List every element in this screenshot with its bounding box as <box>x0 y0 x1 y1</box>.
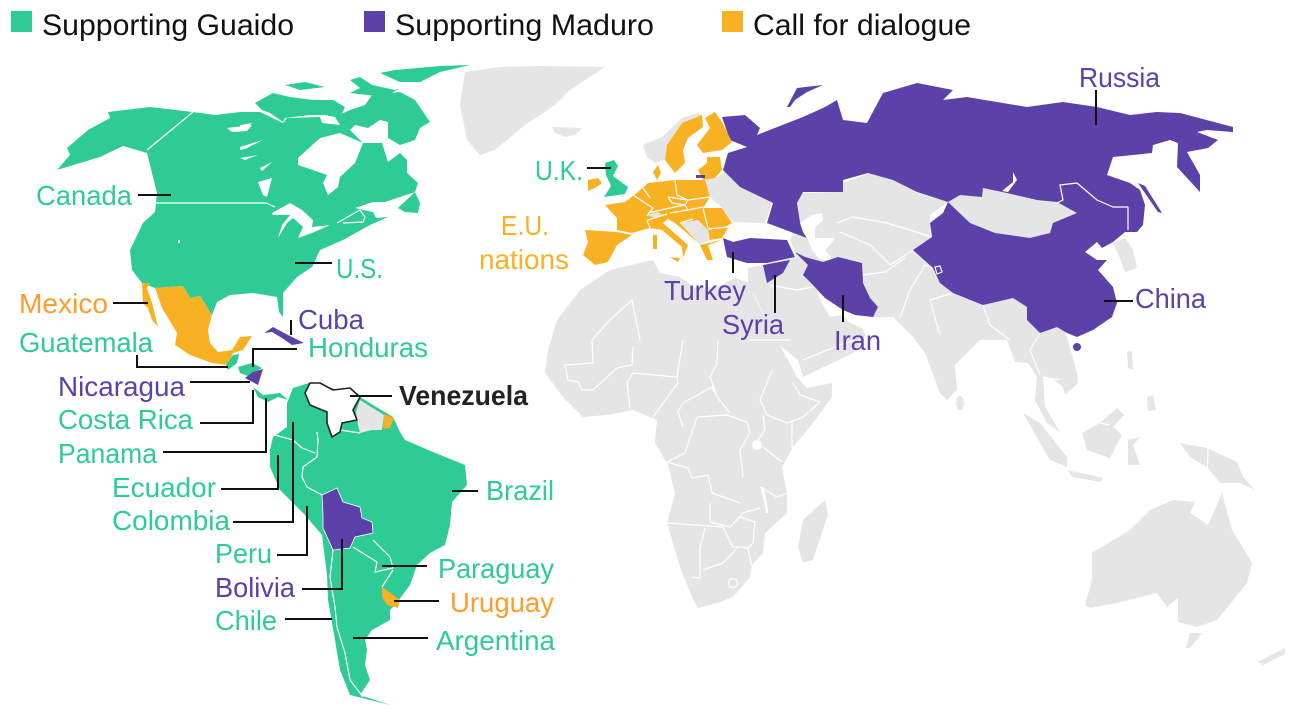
Asia <box>748 173 1078 432</box>
Nicaragua label: Nicaragua <box>58 371 186 402</box>
Africa <box>545 260 832 608</box>
Colombia label: Colombia <box>112 505 231 536</box>
Madagascar <box>798 500 828 563</box>
Balkans <box>680 220 710 245</box>
Indonesia and Philippines <box>1023 351 1255 490</box>
Ecuador label: Ecuador <box>112 472 216 503</box>
Korea <box>1113 238 1137 272</box>
Guianas overlay <box>356 400 384 433</box>
Costa Rica label: Costa Rica <box>58 404 194 435</box>
Mongolia <box>948 188 1077 238</box>
Norway <box>643 113 702 163</box>
New Zealand <box>1258 648 1285 665</box>
U.S. label: U.S. <box>336 253 383 284</box>
Brazil label: Brazil <box>486 475 554 506</box>
Tasmania <box>1186 633 1202 648</box>
Greece <box>700 240 722 260</box>
Turkey <box>723 238 795 263</box>
Syria <box>763 260 790 283</box>
Mexico label: Mexico <box>19 288 108 319</box>
legend <box>11 9 971 42</box>
Iceland <box>552 127 582 137</box>
Turkey label: Turkey <box>664 275 746 306</box>
Sri Lanka <box>956 396 964 410</box>
leader lines <box>113 90 1133 638</box>
Peru label: Peru <box>215 538 272 569</box>
world map: neutral countries <box>356 66 1285 665</box>
United Kingdom <box>604 160 628 197</box>
South America <box>270 382 467 705</box>
Argentina label: Argentina <box>436 625 556 656</box>
neutral country borders <box>565 217 1208 578</box>
Sardinia <box>653 235 657 249</box>
Iran <box>795 252 878 317</box>
E.U. nations label: E.U. <box>501 210 549 241</box>
Spain and Portugal <box>583 230 632 265</box>
North America: Canada and U.S. <box>33 65 470 317</box>
Eastern Europe <box>705 170 772 223</box>
Cuba label: Cuba <box>298 304 365 335</box>
Kaliningrad <box>696 175 705 178</box>
Bolivia <box>322 488 373 550</box>
French Guiana <box>383 414 394 429</box>
Russia and China <box>722 83 1233 351</box>
Sakhalin <box>1138 183 1162 213</box>
Australia <box>1085 493 1252 627</box>
Switzerland <box>647 212 662 218</box>
legend: Call for dialogue <box>753 9 971 42</box>
Venezuela label: Venezuela <box>399 380 529 411</box>
Venezuela <box>305 383 360 437</box>
Caspian Sea <box>800 213 835 260</box>
Uruguay <box>382 587 400 608</box>
Hudson Bay and lakes <box>178 123 363 243</box>
Lake Victoria and Lesotho <box>728 440 767 588</box>
Arctic islands <box>255 65 470 213</box>
Chile label: Chile <box>215 605 277 636</box>
Finland <box>697 112 732 153</box>
Central America <box>226 327 304 402</box>
Continental EU block <box>605 180 732 258</box>
Central Europe borders <box>633 180 728 229</box>
E.U. nations label: nations <box>479 244 569 275</box>
Cuba <box>264 327 304 345</box>
Baltic states <box>698 157 722 180</box>
Ireland <box>588 178 602 191</box>
U.K. label: U.K. <box>535 155 583 186</box>
Syria label: Syria <box>722 309 785 340</box>
European Union <box>583 112 732 265</box>
Guianas <box>356 400 384 433</box>
Lake Baikal and Russia-China border <box>935 172 1128 274</box>
Sicily <box>670 257 680 262</box>
Panama label: Panama <box>58 438 158 469</box>
Novaya Zemlya <box>787 85 823 107</box>
country labels <box>19 62 1207 656</box>
Honduras label: Honduras <box>308 332 428 363</box>
Denmark <box>653 165 661 180</box>
South American borders <box>275 430 393 697</box>
legend: Supporting Guaido <box>42 9 294 42</box>
Hainan <box>1073 343 1081 351</box>
China label: China <box>1135 283 1207 314</box>
Paraguay label: Paraguay <box>438 553 554 584</box>
Canada label: Canada <box>36 180 133 211</box>
Canada and U.S. borders <box>147 112 365 223</box>
Bolivia label: Bolivia <box>215 572 296 603</box>
Guatemala label: Guatemala <box>19 327 154 358</box>
Mexico <box>142 283 252 365</box>
Russia label: Russia <box>1079 62 1161 93</box>
Sweden <box>665 115 703 173</box>
legend: Supporting Maduro <box>395 9 654 42</box>
Uruguay label: Uruguay <box>450 587 554 618</box>
Iran label: Iran <box>834 325 881 356</box>
Greenland <box>460 66 605 155</box>
